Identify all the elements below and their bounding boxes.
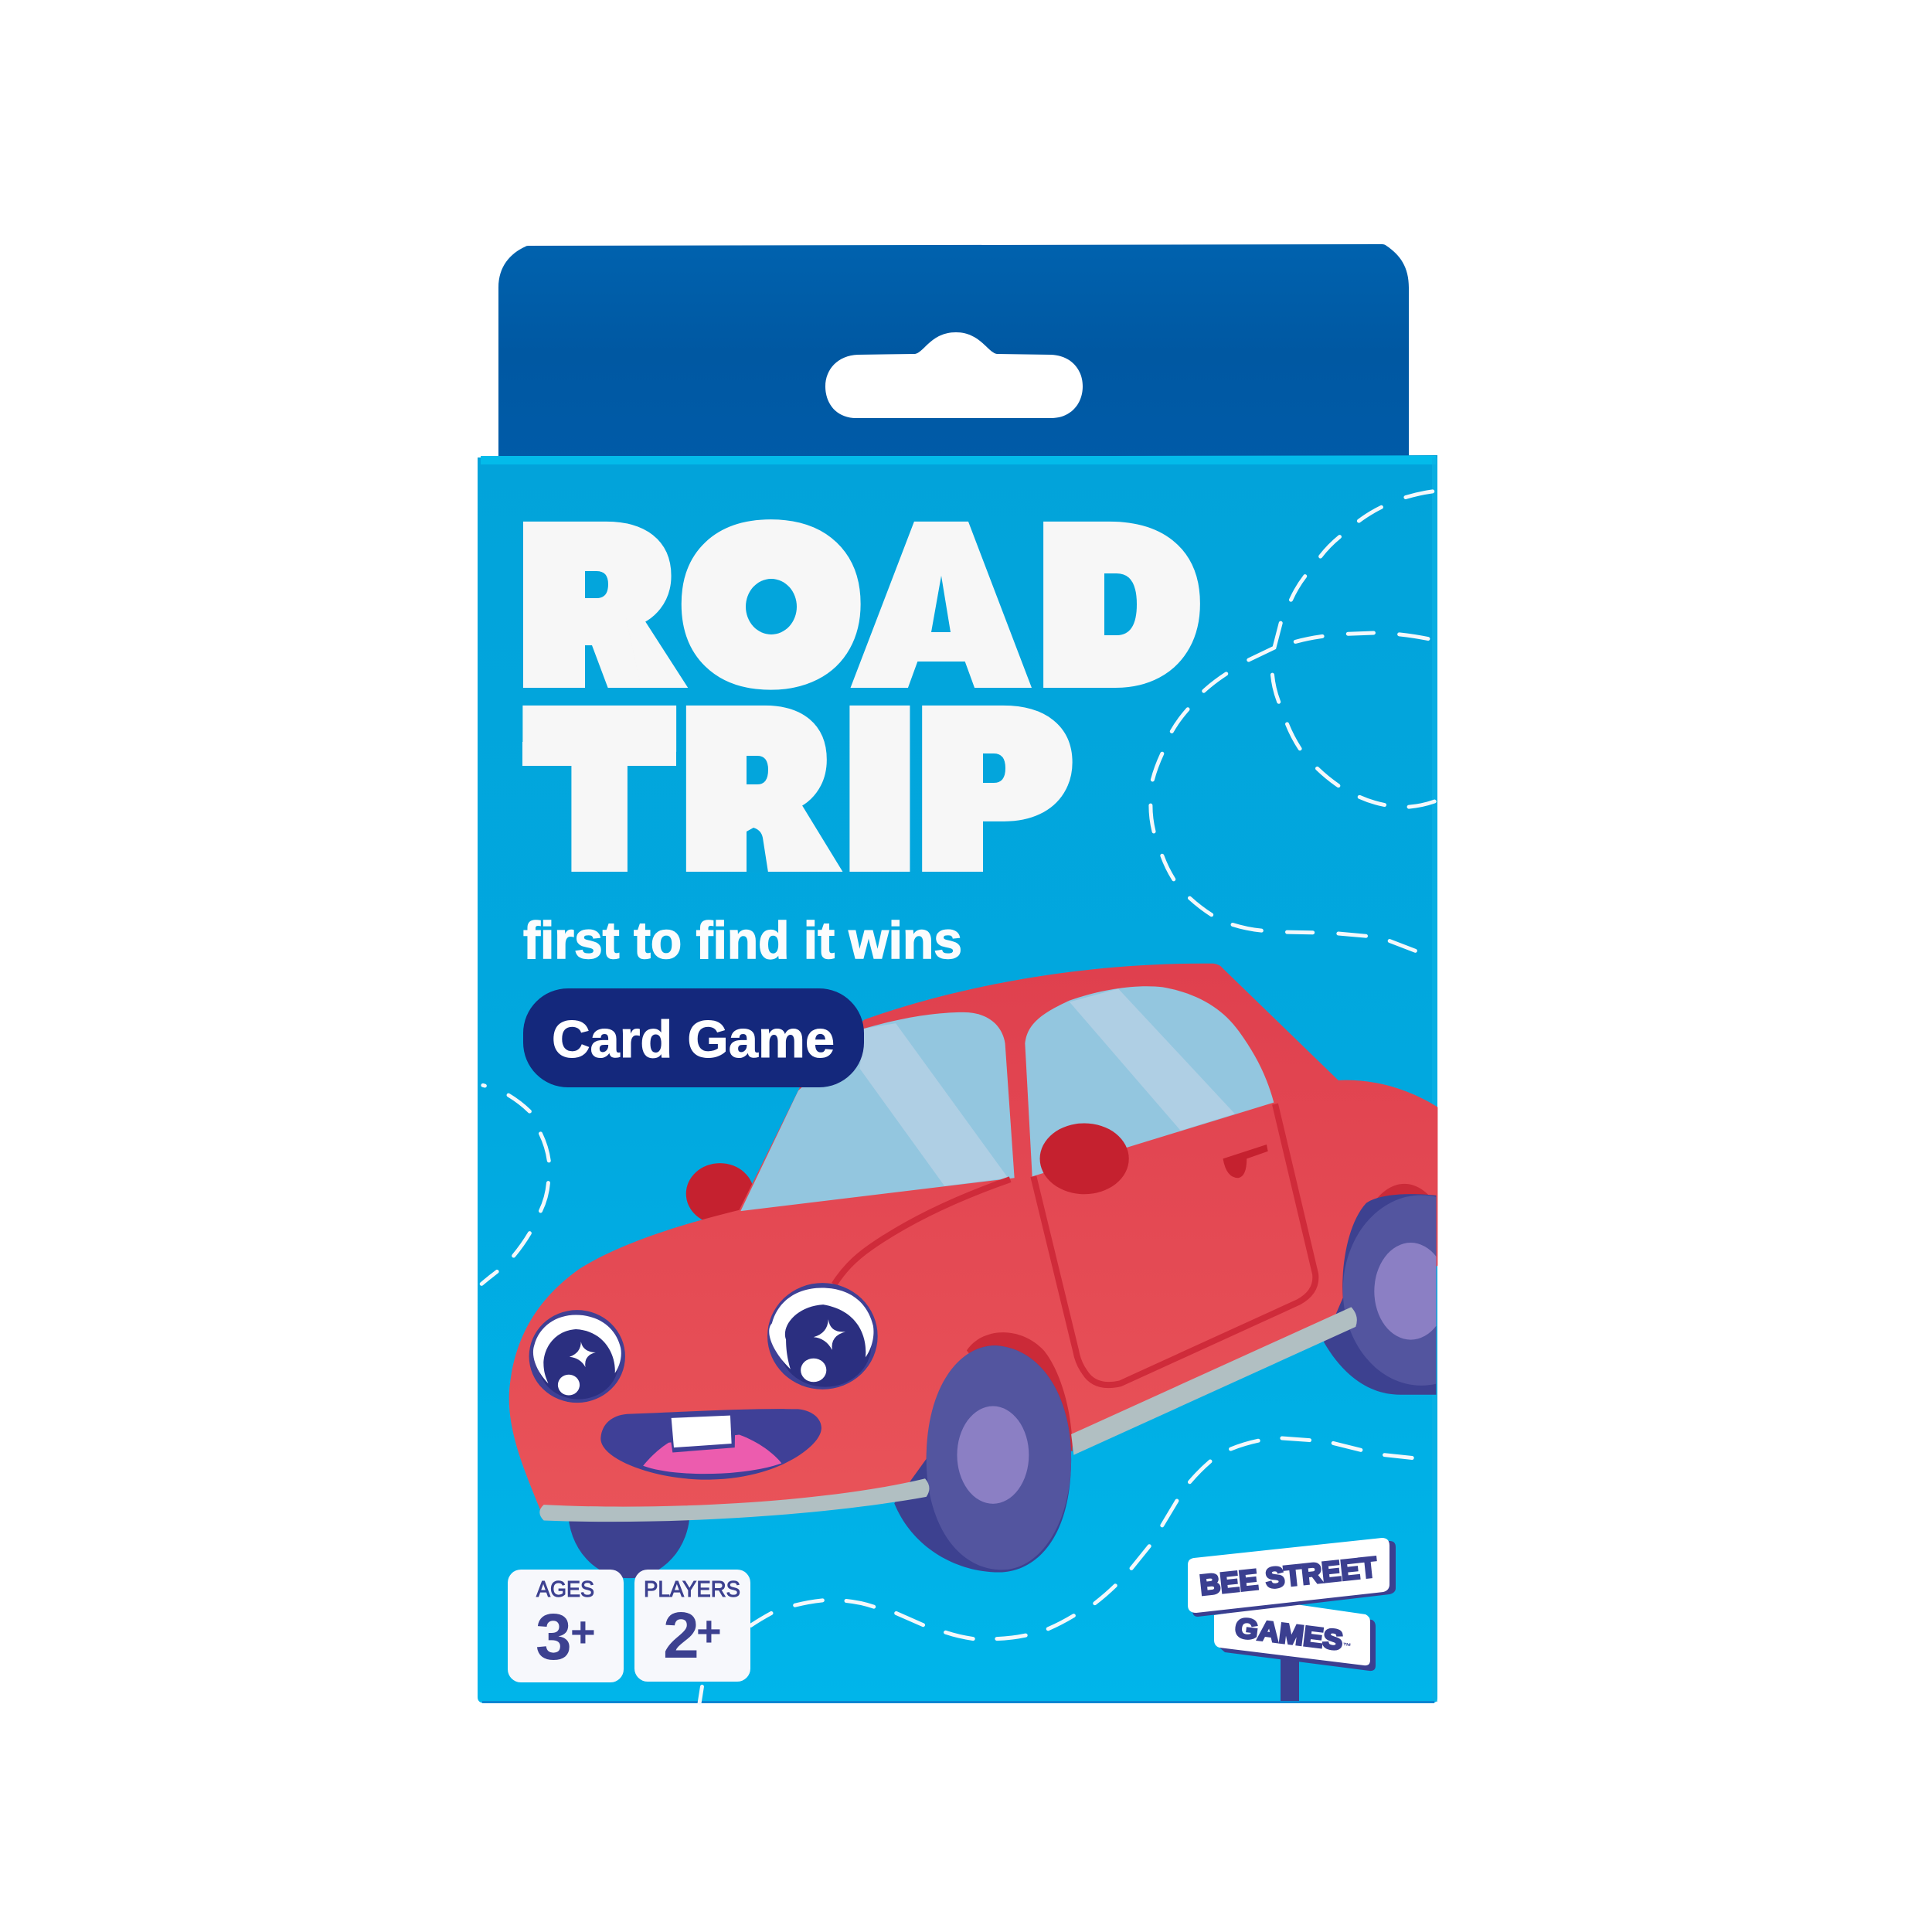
letter counters [585, 571, 1137, 872]
red car illustration [509, 964, 1500, 1578]
title letters: R [684, 672, 827, 904]
side sill [1071, 1307, 1357, 1455]
side window glare [1070, 988, 1235, 1131]
rear wheel arch [1377, 1184, 1428, 1198]
heavy-weight shaping of letter counters [522, 523, 1147, 872]
ages badge: + [570, 1607, 596, 1656]
title letters: D [1041, 489, 1197, 721]
title letters: P [920, 672, 1067, 904]
car front details [529, 1283, 1357, 1573]
title letters: T [532, 672, 666, 904]
side window [1025, 986, 1274, 1176]
ages badge: AGES [536, 1577, 594, 1602]
title letters: R [521, 488, 671, 721]
left eye [529, 1310, 625, 1403]
hang tab with euro hole [498, 244, 1409, 464]
players badge: 2 [663, 1599, 699, 1672]
bee street games sign logo [1188, 1538, 1396, 1701]
sign post [1281, 1658, 1299, 1701]
right eye [767, 1283, 878, 1389]
car lower parts: mirror, far wheel, body [509, 964, 1444, 1578]
card game pill: Card Game [552, 1010, 835, 1069]
lower board [1214, 1604, 1376, 1671]
title letters: O [685, 489, 858, 721]
title letters: A [862, 488, 1020, 721]
door and hood seams [835, 1104, 1315, 1385]
upper board: BEE STREET [1199, 1551, 1379, 1601]
rear wheel [1324, 1194, 1436, 1395]
dashed road routes upper right [1151, 492, 1434, 951]
subtitle: first to find it wins [523, 911, 962, 970]
front bumper [539, 1478, 929, 1522]
car upper details: windows, door, rear wheel [740, 986, 1500, 1395]
far front wheel [569, 1520, 689, 1578]
side mirror [1040, 1123, 1129, 1194]
door handle [1223, 1145, 1268, 1178]
title letters [521, 488, 1197, 904]
players badge: + [696, 1607, 722, 1655]
players badge: PLAYERS [644, 1577, 740, 1602]
title [521, 488, 1197, 904]
front wheel [894, 1345, 1071, 1573]
car body [509, 964, 1444, 1517]
left mirror [686, 1163, 754, 1224]
ages badge [508, 1570, 624, 1682]
mouth [600, 1409, 821, 1480]
card game pill [523, 988, 864, 1087]
upper board [1188, 1538, 1396, 1617]
windshield glare [859, 1023, 1008, 1186]
box front panel [478, 455, 1437, 1703]
title letters: I [847, 672, 913, 904]
players badge [634, 1570, 750, 1682]
ages badge: 3 [536, 1600, 572, 1673]
front wheel arch [967, 1332, 1073, 1451]
lower board: GAMES [1233, 1611, 1345, 1656]
lower board: ™ [1342, 1641, 1352, 1651]
windshield [740, 1012, 1015, 1211]
dashed road routes left and bottom [481, 1085, 1412, 1703]
